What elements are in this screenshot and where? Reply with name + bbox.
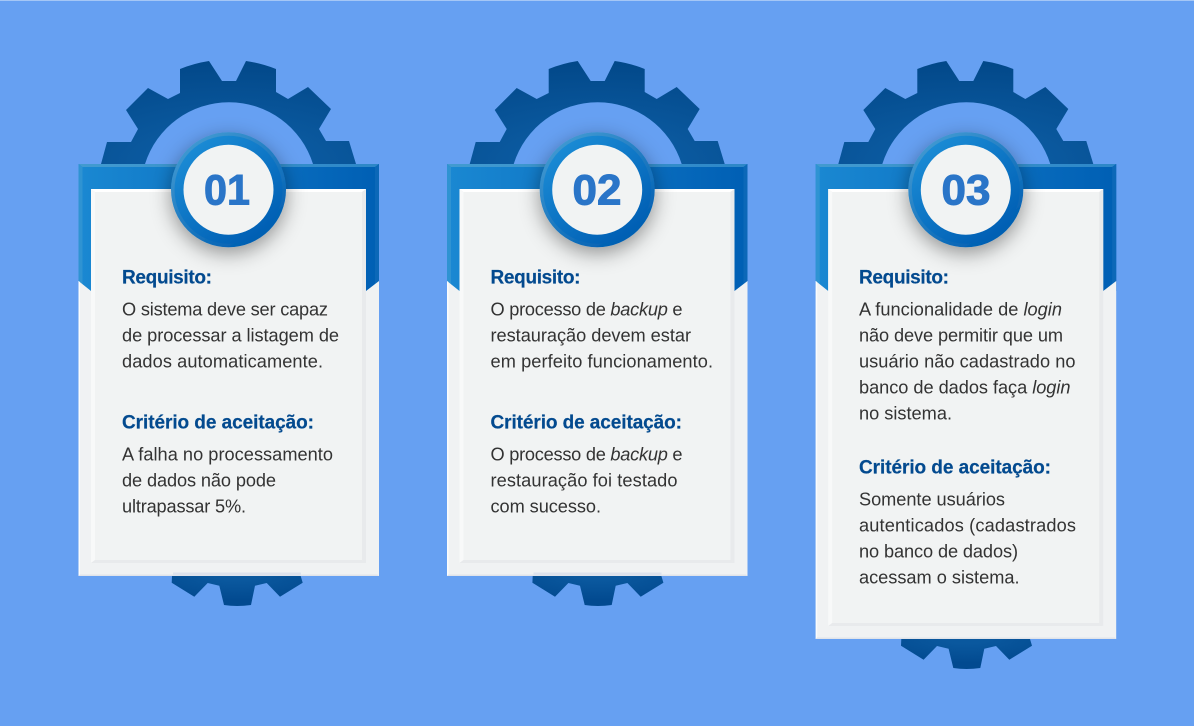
card body 03 [816, 164, 1116, 639]
text block: requisito 01: de processar a listagem de [122, 326, 339, 346]
badge 01: 01 [204, 166, 250, 214]
text block: requisito 01 [122, 268, 339, 372]
text block: requisito 03: banco de dados faça login [859, 378, 1070, 398]
text block: criterio 02: Critério de aceitação: [490, 412, 682, 434]
text block: requisito 03: usuário não cadastrado no [859, 352, 1076, 372]
text block: requisito 03 [859, 268, 1076, 424]
badge 03 [908, 132, 1023, 247]
text block: criterio 03: acessam o sistema. [859, 568, 1020, 588]
text block: requisito 02: O processo de backup e [490, 300, 682, 320]
text block: criterio 03: autenticados (cadastrados [859, 516, 1076, 536]
panel: card 02 [447, 61, 748, 606]
text block: criterio 03 [859, 458, 1076, 588]
text block: criterio 02 [490, 412, 682, 516]
text block: requisito 01: O sistema deve ser capaz [122, 300, 328, 320]
icon: gear bottom 03 [901, 639, 1032, 669]
badge 02: 02 [572, 166, 622, 214]
icon: gear top 01 [101, 61, 356, 164]
text block: criterio 01: ultrapassar 5%. [122, 496, 246, 516]
badge 01 [171, 132, 286, 247]
text block: criterio 01: Critério de aceitação: [122, 412, 314, 434]
text block: requisito 03: no sistema. [859, 404, 952, 424]
text block: requisito 03: Requisito: [859, 268, 949, 288]
text block: requisito 02: restauração devem estar [490, 326, 691, 346]
text block: requisito 01: dados automaticamente. [122, 352, 323, 372]
text block: requisito 03: A funcionalidade de login [859, 300, 1062, 320]
text block: requisito 02: em perfeito funcionamento. [490, 352, 713, 372]
text block: criterio 03: no banco de dados) [859, 542, 1018, 562]
panel: card 01 [78, 61, 379, 606]
text block: criterio 03: Somente usuários [859, 490, 1005, 510]
text block: criterio 02: restauração foi testado [490, 470, 678, 490]
text block: criterio 01 [122, 412, 333, 516]
card body 01 [78, 164, 379, 576]
badge 02 [540, 132, 655, 247]
icon: gear bottom 01 [172, 576, 303, 606]
text block: criterio 01: A falha no processamento [122, 444, 333, 464]
text block: criterio 02: com sucesso. [490, 496, 601, 516]
text block: requisito 03: não deve permitir que um [859, 326, 1063, 346]
card body 02 [447, 164, 748, 576]
panel: card 03 [816, 61, 1116, 669]
badge 03: 03 [942, 166, 990, 214]
text block: criterio 03: Critério de aceitação: [859, 458, 1051, 478]
icon: gear top 02 [470, 61, 725, 164]
text block: criterio 01: de dados não pode [122, 470, 276, 490]
icon: gear top 03 [838, 61, 1093, 164]
text block: requisito 02 [490, 268, 713, 372]
text block: requisito 01: Requisito: [122, 268, 212, 288]
text block: requisito 02: Requisito: [490, 268, 580, 288]
text block: criterio 02: O processo de backup e [490, 444, 682, 464]
icon: gear bottom 02 [532, 576, 663, 606]
